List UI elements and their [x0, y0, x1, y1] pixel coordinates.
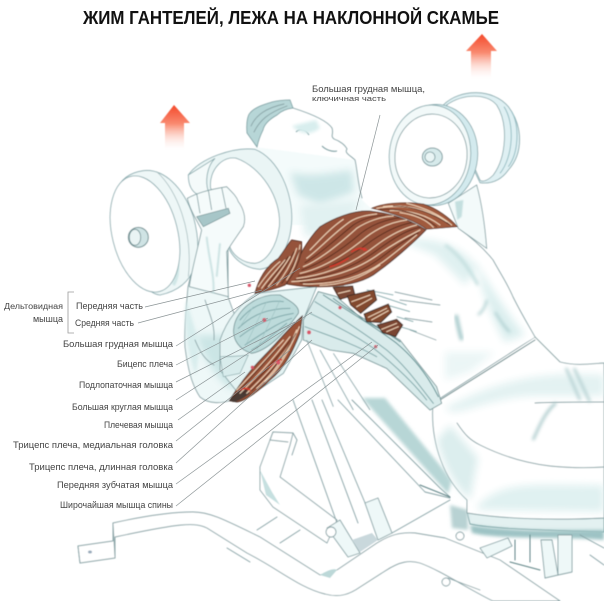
biceps	[234, 295, 299, 353]
forearm behind right dumbbell	[448, 185, 487, 248]
label: triceps long head: Трицепс плеча, длинная головка	[29, 462, 173, 472]
title: ЖИМ ГАНТЕЛЕЙ, ЛЕЖА НА НАКЛОННОЙ СКАМЬЕ	[82, 7, 499, 28]
bench back pad	[338, 398, 452, 498]
label: pectoralis major: Большая грудная мышца	[63, 339, 174, 350]
arrow: left dumbbell up	[160, 105, 190, 152]
label: brachialis: Плечевая мышца	[104, 420, 174, 431]
head and neck	[247, 100, 375, 238]
bench illustration	[78, 93, 604, 601]
left hand	[187, 187, 245, 297]
label: triceps medial head: Трицепс плеча, медиальная головка	[13, 440, 174, 451]
bench uprights and pivot	[293, 400, 450, 557]
back plate	[188, 149, 292, 269]
muscle: serratus lobes	[333, 286, 403, 337]
label: deltoid muscle with bracket: мышца	[33, 314, 63, 324]
right dumbbell	[384, 93, 520, 248]
label: biceps: Бицепс плеча	[117, 359, 174, 370]
bench frame tube	[78, 512, 560, 601]
label: teres major: Большая круглая мышца	[72, 402, 174, 413]
label: deltoid muscle with bracket: Передняя часть	[76, 301, 143, 311]
left dumbbell	[99, 149, 292, 299]
bench seat and mechanism	[442, 505, 604, 590]
muscles	[229, 203, 457, 402]
muscle markers	[248, 284, 377, 369]
muscle: deltoid	[255, 240, 302, 293]
shorts	[433, 333, 604, 519]
label: subscapularis: Подлопаточная мышца	[79, 380, 174, 391]
label: deltoid muscle with bracket: Дельтовидная	[4, 302, 63, 311]
muscle: sternal pectoral	[287, 211, 426, 287]
label: deltoid muscle with bracket	[4, 292, 143, 333]
left forearm	[185, 245, 270, 403]
bench bracket tube	[257, 432, 337, 543]
label: deltoid muscle with bracket: Средняя часть	[75, 318, 134, 328]
muscle: clavicular pectoral	[372, 203, 457, 229]
leader lines	[138, 115, 380, 506]
label: clavicular pectoral	[312, 84, 425, 103]
label: clavicular pectoral: ключичная часть	[312, 96, 386, 103]
label: clavicular pectoral: Большая грудная мышца,	[312, 84, 425, 95]
label: serratus anterior: Передняя зубчатая мышца	[57, 480, 174, 491]
upper arm and shoulder	[220, 287, 317, 400]
label: latissimus dorsi: Широчайшая мышца спины	[60, 500, 173, 511]
front plate	[113, 170, 198, 295]
brachialis strip	[220, 355, 248, 377]
latissimus and triceps band	[303, 290, 442, 410]
torso	[340, 205, 535, 395]
arrow: right dumbbell up	[466, 34, 497, 81]
muscle: triceps strip	[229, 316, 302, 402]
